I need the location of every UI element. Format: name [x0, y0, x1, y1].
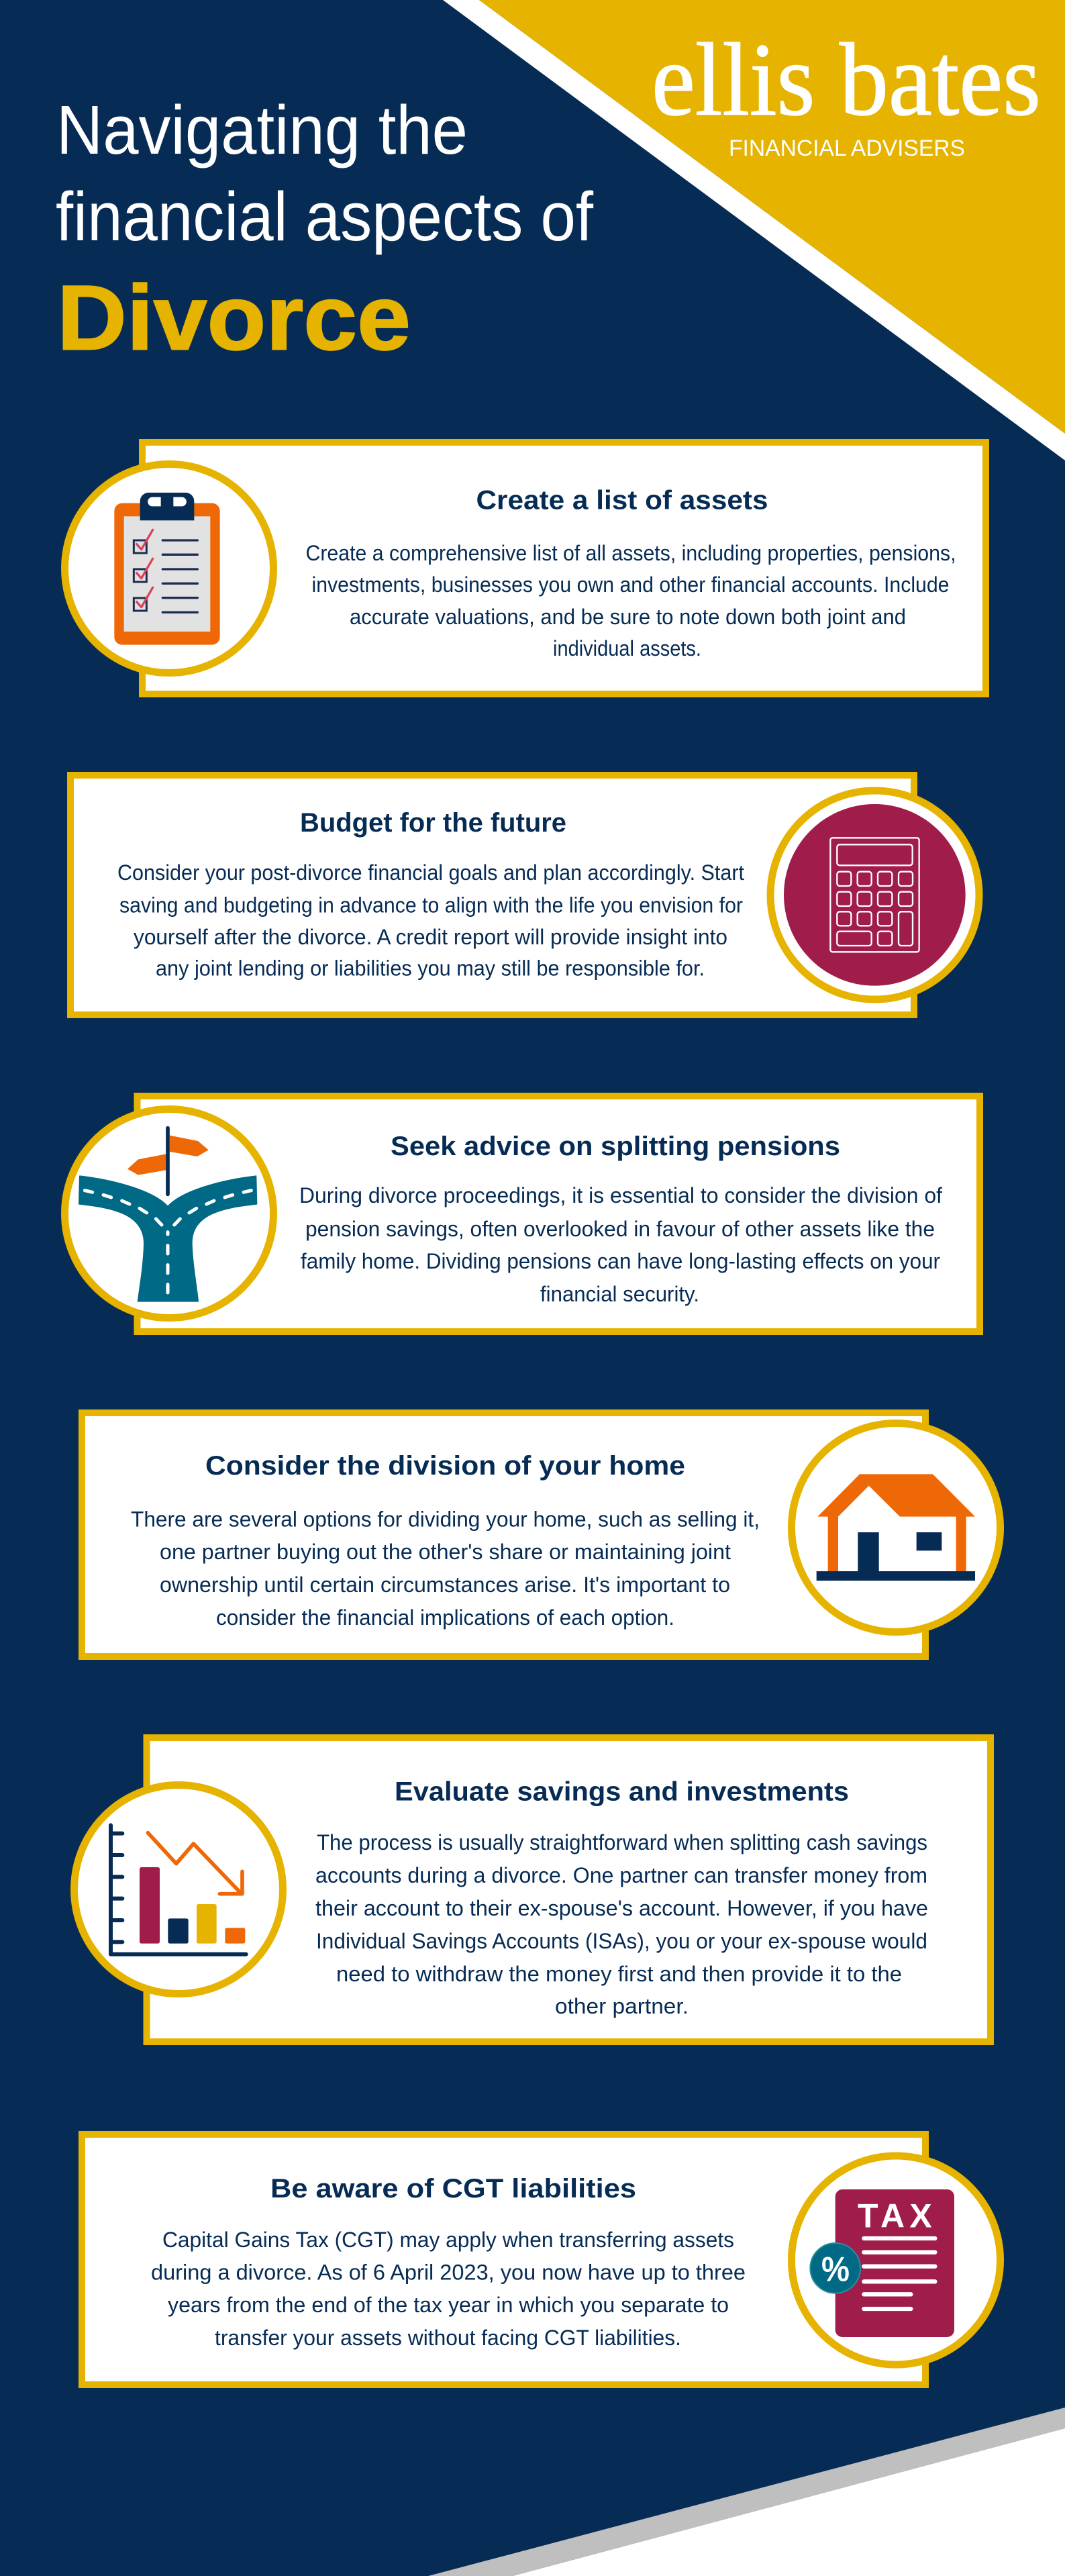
- text block: budget for the future: [117, 860, 744, 980]
- title: financial aspects of: [56, 178, 593, 255]
- heading: seek advice on splitting pensions: Seek advice on splitting pensions: [391, 1132, 840, 1161]
- text block: budget for the future: any joint lending or liabilities you may still be responsible for.: [156, 956, 705, 980]
- text block: evaluate savings and investments: The process is usually straightforward when splitting cash savings: [317, 1830, 927, 1854]
- bottom corner: grey stripe and white triangle: [428, 2408, 1065, 2576]
- text block: seek advice on splitting pensions: During divorce proceedings, it is essential to consider the division of: [299, 1183, 942, 1207]
- logo: ellis bates financial advisers: FINANCIAL ADVISERS: [729, 136, 965, 161]
- text block: create a list of assets: accurate valuations, and be sure to note down both joint and: [350, 605, 906, 629]
- text block: be aware of cgt liabilities: during a divorce. As of 6 April 2023, you now have up to three: [151, 2261, 746, 2285]
- text block: consider the division of your home: ownership until certain circumstances arise. It's important to: [160, 1573, 730, 1597]
- icon: forked road with signpost: [64, 1109, 274, 1318]
- panel: budget for the future: [70, 775, 979, 1015]
- text block: be aware of cgt liabilities: [151, 2228, 746, 2350]
- text block: be aware of cgt liabilities: Capital Gains Tax (CGT) may apply when transferring assets: [162, 2228, 734, 2252]
- text block: create a list of assets: individual assets.: [553, 636, 701, 660]
- text block: budget for the future: Consider your post-divorce financial goals and plan accordingly. Start: [117, 860, 744, 885]
- icon: tax document with percent badge: TAX: [858, 2197, 932, 2235]
- icon: tax document with percent badge: %: [821, 2249, 850, 2288]
- text block: create a list of assets: investments, businesses you own and other financial accounts. Include: [311, 573, 949, 597]
- panel: consider the division of your home: [82, 1413, 1000, 1656]
- icon: calculator: [770, 791, 979, 999]
- text block: seek advice on splitting pensions: pension savings, often overlooked in favour of other assets like the: [305, 1217, 935, 1241]
- panel: be aware of cgt liabilities: [82, 2134, 1000, 2385]
- text block: consider the division of your home: one partner buying out the other's share or maintaining joint: [160, 1540, 731, 1564]
- text block: consider the division of your home: [131, 1507, 760, 1630]
- text block: be aware of cgt liabilities: transfer your assets without facing CGT liabilities.: [215, 2326, 681, 2350]
- title: Divorce: [57, 267, 411, 369]
- icon: falling bar chart: [74, 1785, 283, 1993]
- text block: consider the division of your home: consider the financial implications of each option.: [216, 1605, 674, 1630]
- logo: ellis bates financial advisers: ellis bates: [652, 21, 1041, 137]
- heading: budget for the future: Budget for the future: [300, 808, 566, 838]
- icon: clipboard checklist: [64, 464, 274, 673]
- text block: seek advice on splitting pensions: financial security.: [540, 1282, 699, 1306]
- heading: be aware of cgt liabilities: Be aware of CGT liabilities: [270, 2174, 636, 2203]
- panel: seek advice on splitting pensions: [64, 1096, 980, 1332]
- text block: seek advice on splitting pensions: [299, 1183, 942, 1306]
- text block: create a list of assets: [306, 541, 956, 660]
- text block: evaluate savings and investments: accounts during a divorce. One partner can transfer money from: [315, 1863, 927, 1887]
- text block: create a list of assets: Create a comprehensive list of all assets, including properties, pensions,: [306, 541, 956, 565]
- corner banner: white stripe and gold triangle: [443, 0, 1065, 460]
- text block: budget for the future: yourself after the divorce. A credit report will provide insight into: [134, 925, 727, 949]
- heading: create a list of assets: Create a list of assets: [476, 486, 768, 515]
- title: [56, 91, 593, 369]
- text block: evaluate savings and investments: their account to their ex-spouse's account. However, if you have: [315, 1896, 928, 1920]
- text block: evaluate savings and investments: other partner.: [555, 1994, 689, 2018]
- panel: evaluate savings and investments: [74, 1738, 991, 2042]
- icon: tax document with percent badge: [792, 2156, 1000, 2365]
- heading: evaluate savings and investments: Evaluate savings and investments: [395, 1777, 849, 1807]
- title: Navigating the: [56, 91, 468, 168]
- icon: house: [792, 1423, 1000, 1632]
- text block: consider the division of your home: There are several options for dividing your home, such as selling it,: [131, 1507, 760, 1532]
- text block: evaluate savings and investments: need to withdraw the money first and then provide it to the: [336, 1962, 902, 1986]
- text block: evaluate savings and investments: [315, 1830, 928, 2018]
- text block: be aware of cgt liabilities: years from the end of the tax year in which you separate to: [168, 2293, 729, 2317]
- heading: consider the division of your home: Consider the division of your home: [205, 1451, 685, 1481]
- text block: evaluate savings and investments: Individual Savings Accounts (ISAs), you or your ex-spouse would: [316, 1929, 927, 1953]
- panel: create a list of assets: [64, 442, 986, 694]
- text block: seek advice on splitting pensions: family home. Dividing pensions can have long-lasting effects on your: [301, 1249, 940, 1273]
- text block: budget for the future: saving and budgeting in advance to align with the life you envision for: [119, 893, 743, 917]
